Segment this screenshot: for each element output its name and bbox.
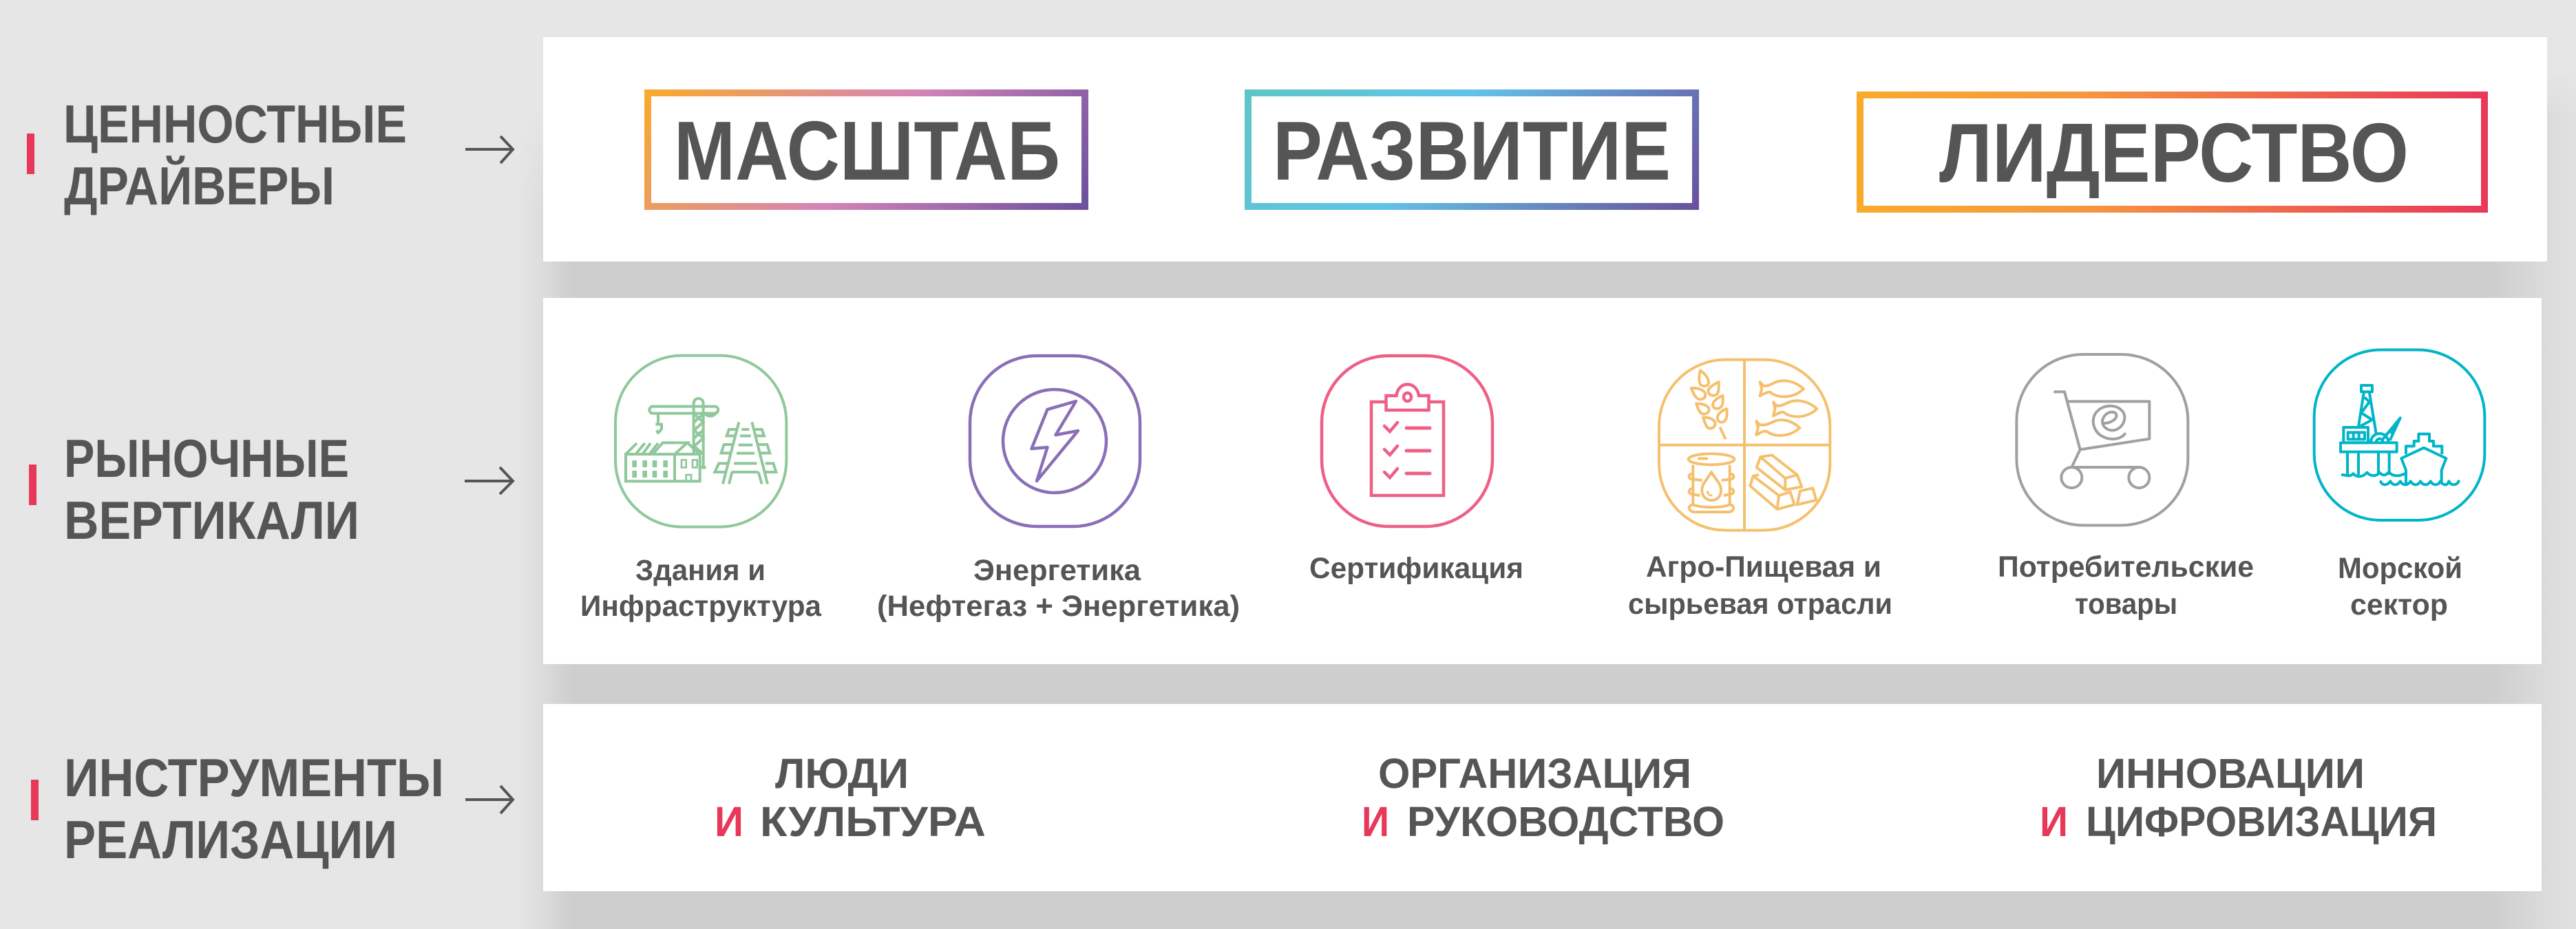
text: organization and leadership: ОРГАНИЗАЦИЯ [1378,750,1691,797]
label: marine sector: Морской [2338,552,2462,585]
arrow: value drivers [465,136,513,163]
label: marine sector [2338,552,2462,621]
text: innovation and digitalization: ИННОВАЦИИ [2096,750,2365,797]
text: people and culture: ЛЮДИ [775,750,909,797]
label: energy [877,554,1240,623]
label: energy: (Нефтегаз + Энергетика) [877,590,1240,623]
text: innovation and digitalization [2040,750,2437,845]
label: consumer goods [1998,551,2254,621]
icon: energy [970,356,1140,526]
panel: market verticals [543,298,2542,664]
label: certification: Сертификация [1309,552,1523,585]
icon: buildings and infrastructure [615,356,786,527]
label: agro-food and commodities: сырьевая отрасли [1628,588,1892,621]
row label: implementation tools: РЕАЛИЗАЦИИ [64,809,397,870]
box: scale: МАСШТАБ [674,104,1060,197]
label: consumer goods: товары [2075,588,2177,621]
row label: market verticals: ВЕРТИКАЛИ [64,490,359,551]
arrow: market verticals [465,467,513,494]
row label: value drivers [27,94,407,216]
label: buildings and infrastructure: Инфраструктура [580,590,822,623]
panel: implementation tools [543,704,2542,891]
row label: implementation tools [31,747,444,870]
label: consumer goods: Потребительские [1998,551,2254,584]
label: agro-food and commodities: Агро-Пищевая и [1646,551,1881,584]
label: agro-food and commodities [1628,551,1892,621]
label: marine sector: сектор [2350,588,2448,621]
icon: agro-food and commodities [1659,360,1830,531]
label: buildings and infrastructure [580,554,822,623]
row label: market verticals [29,428,359,551]
label: buildings and infrastructure: Здания и [635,554,766,587]
icon: marine sector [2314,350,2484,520]
text: people and culture: КУЛЬТУРА [760,798,986,845]
arrow: implementation tools [465,786,513,813]
panel: value drivers [543,37,2547,261]
box: leadership [1860,95,2484,209]
row label: market verticals: РЫНОЧНЫЕ [64,428,349,489]
text: organization and leadership: И [1362,798,1389,845]
label: energy: Энергетика [973,554,1141,587]
icon: certification [1322,356,1492,526]
box: development: РАЗВИТИЕ [1273,104,1671,197]
text: organization and leadership [1362,750,1724,845]
box: leadership: ЛИДЕРСТВО [1939,106,2409,200]
text: innovation and digitalization: ЦИФРОВИЗАЦИЯ [2086,798,2437,845]
text: people and culture: И [715,798,743,845]
text: organization and leadership: РУКОВОДСТВО [1407,798,1724,845]
icon: consumer goods [2016,354,2188,525]
text: innovation and digitalization: И [2040,798,2068,845]
row label: value drivers: ЦЕННОСТНЫЕ [63,94,407,154]
text: people and culture [715,750,986,845]
row label: implementation tools: ИНСТРУМЕНТЫ [64,747,444,808]
row label: value drivers: ДРАЙВЕРЫ [64,156,335,216]
